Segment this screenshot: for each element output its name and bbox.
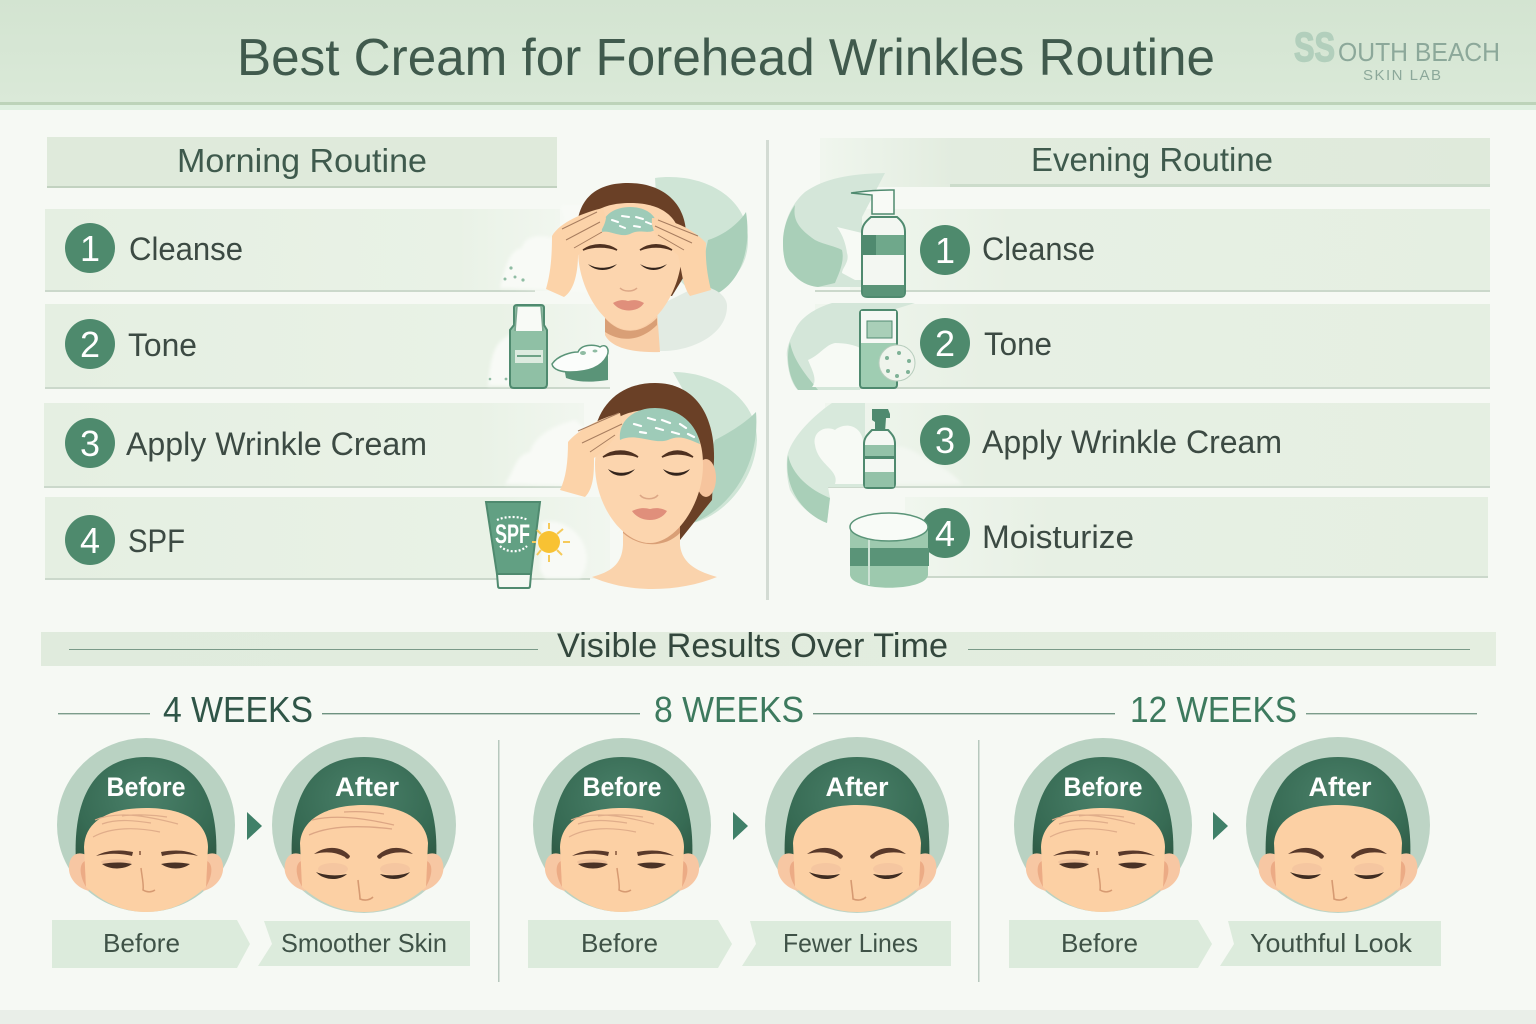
heading: evening routine: Evening Routine [1031, 141, 1273, 178]
hand [560, 413, 622, 497]
icon: SPF tube [486, 502, 540, 588]
logo: South Beach Skin Lab: OUTH BEACH [1338, 37, 1500, 67]
step badges and labels: evening: Cleanse [982, 231, 1095, 267]
fingers [562, 212, 698, 250]
shoulders and neck [592, 515, 717, 589]
label: smoother skin [258, 921, 470, 966]
label: before: Before [1061, 928, 1138, 958]
logo: South Beach Skin Lab: SS [1294, 24, 1335, 70]
step badges and labels: evening: 2 [935, 323, 955, 364]
green swoosh: tone [787, 303, 915, 390]
step badges and labels: evening: 3 [935, 420, 955, 461]
timeline headers [58, 689, 1477, 730]
ear [696, 459, 716, 497]
step row 3: apply wrinkle cream [44, 403, 584, 488]
label: before: Before [103, 928, 180, 958]
step badges and labels: evening [920, 225, 1282, 558]
green swoosh behind head [673, 372, 757, 523]
face [595, 410, 703, 543]
center divider [766, 140, 769, 600]
icon: toner box with pad [860, 310, 915, 388]
panel: evening routine [783, 138, 1490, 588]
result group: 8 weeks [528, 737, 951, 968]
face: after: After [335, 772, 399, 802]
icon: cream jar [850, 513, 929, 588]
lips [613, 300, 644, 310]
green swoosh: apply cream [787, 403, 865, 523]
heading: 4 weeks: 4 WEEKS [163, 689, 313, 730]
label: fewer lines [742, 921, 951, 966]
cloud wash beside pump [895, 447, 962, 484]
icon: pump bottle small [864, 409, 895, 488]
illustration: woman applying cream, lower [560, 372, 757, 589]
icon: sun [532, 523, 570, 562]
step row 3: apply wrinkle cream [820, 403, 1490, 488]
heading: morning routine [47, 137, 557, 188]
heading: morning routine: Morning Routine [177, 142, 427, 179]
lips [632, 508, 667, 520]
results heading band [41, 627, 1496, 666]
specks near cloud washes [489, 266, 525, 380]
face [578, 203, 682, 330]
step row 4: SPF: 4 [80, 520, 100, 561]
step badges and labels: evening: Moisturize [982, 519, 1134, 555]
nose [640, 495, 658, 499]
arrow [247, 812, 262, 840]
face: before [57, 738, 235, 912]
step badges and labels: evening: 1 [935, 230, 955, 271]
arrow [1213, 812, 1228, 840]
icon: pump bottle [851, 190, 905, 297]
result group: 4 weeks [52, 737, 470, 968]
step row 2: tone: Tone [128, 327, 197, 363]
face: after: After [1308, 772, 1372, 802]
label: before: Before [581, 928, 658, 958]
icon: cotton pad [552, 345, 608, 382]
hair [577, 183, 688, 296]
result group: 12 weeks [1009, 737, 1441, 968]
icon: SPF tube: SPF [495, 519, 530, 549]
step row 4: SPF [45, 497, 610, 580]
label: before [1009, 920, 1212, 968]
face: after [765, 737, 949, 913]
face: after [272, 737, 456, 913]
arrow [733, 812, 748, 840]
label: before [528, 920, 732, 968]
step badges and labels: evening: 4 [935, 513, 955, 554]
eyes [588, 264, 667, 270]
label: smoother skin: Smoother Skin [281, 928, 447, 958]
panel: morning routine [44, 137, 610, 580]
right hand [652, 218, 711, 296]
column divider right [978, 740, 980, 982]
step row 4: SPF: SPF [128, 523, 185, 559]
face: before [533, 738, 711, 912]
step row 3: apply wrinkle cream: 3 [80, 423, 100, 464]
step row 4: moisturize [905, 497, 1488, 578]
title: Best Cream for Forehead Wrinkles Routine [237, 29, 1215, 87]
icon: toner bottle [510, 305, 547, 388]
green swoosh behind head [650, 177, 748, 351]
heading: 12 weeks: 12 WEEKS [1130, 689, 1297, 730]
heading: 8 weeks: 8 WEEKS [654, 689, 804, 730]
hair [593, 383, 714, 540]
bottom strip [0, 1010, 1536, 1024]
label: before [52, 920, 250, 968]
forehead cream mask [602, 207, 657, 235]
logo: South Beach Skin Lab: SKIN LAB [1363, 67, 1441, 84]
neck [605, 310, 660, 352]
logo: South Beach Skin Lab [1294, 24, 1500, 84]
face: before: Before [106, 772, 186, 802]
face: before: Before [1064, 772, 1142, 802]
fingers [578, 413, 622, 452]
header banner [0, 0, 1536, 110]
step badges and labels: evening: Tone [984, 326, 1052, 362]
nose [620, 288, 637, 291]
face: after: After [826, 772, 889, 802]
heading: evening routine [820, 138, 1490, 187]
illustration: woman applying cream, upper [546, 177, 748, 352]
step row 3: apply wrinkle cream: Apply Wrinkle Cream [126, 426, 427, 462]
results heading band: Visible Results Over Time [557, 627, 948, 665]
brows [583, 245, 672, 250]
face: before: Before [582, 772, 662, 802]
label: youthful look [1220, 921, 1441, 966]
left hand [546, 208, 606, 297]
eyes [608, 469, 690, 476]
step row 2: tone: 2 [80, 324, 100, 365]
label: fewer lines: Fewer Lines [783, 928, 918, 958]
green swoosh: cleanse [783, 173, 885, 287]
step row 1: cleanse [45, 209, 560, 292]
face: after [1246, 737, 1430, 913]
step row 1: cleanse: 1 [80, 228, 100, 269]
step row 1: cleanse: Cleanse [129, 231, 243, 267]
step row 1: cleanse [815, 209, 1490, 292]
label: youthful look: Youthful Look [1250, 928, 1413, 958]
step badges and labels: evening: Apply Wrinkle Cream [982, 424, 1282, 460]
column divider left [498, 740, 500, 982]
brows [603, 451, 693, 457]
face: before [1014, 738, 1192, 912]
step row 2: tone [815, 304, 1490, 389]
forehead cream mask [620, 408, 700, 444]
step row 2: tone [45, 304, 610, 389]
cloud washes behind morning products [488, 205, 600, 578]
